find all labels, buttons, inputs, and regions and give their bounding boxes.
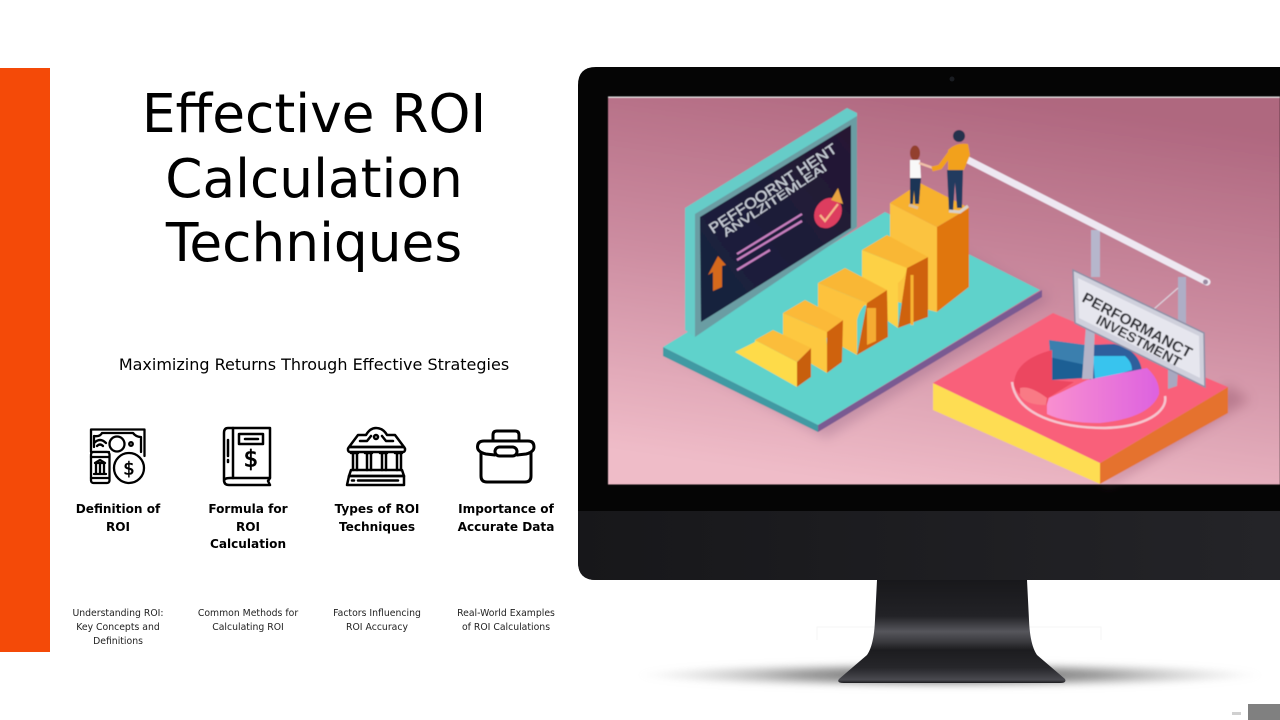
pie chart — [1012, 340, 1165, 428]
heading — [208, 502, 288, 551]
bar 1 — [735, 330, 811, 387]
monitor body — [578, 67, 1280, 580]
icon: money, phone and coin: $ — [123, 458, 135, 480]
icon: money, phone and coin — [90, 428, 146, 484]
description: of ROI Calculations — [462, 622, 550, 633]
description: Understanding ROI: — [72, 608, 164, 619]
column: formula for ROI — [198, 426, 298, 633]
heading: Techniques — [339, 520, 415, 534]
woman — [909, 146, 936, 208]
icon: briefcase — [476, 430, 536, 484]
icon: bank building with columns — [346, 426, 406, 486]
heading — [334, 502, 419, 534]
description — [72, 608, 164, 647]
description: Key Concepts and — [76, 622, 160, 633]
performance sign: PERFORMANCT — [1079, 290, 1195, 362]
heading — [76, 502, 160, 534]
description — [333, 608, 421, 633]
title — [142, 82, 486, 274]
icon: ledger book with dollar sign — [222, 426, 272, 486]
title: Calculation — [165, 147, 463, 210]
orange accent bar — [0, 68, 50, 652]
title: Techniques — [166, 211, 462, 274]
subtitle: Maximizing Returns Through Effective Strategies — [119, 355, 509, 374]
icon: ledger book with dollar sign: $ — [244, 446, 258, 472]
presentation board: ANVLZITEMLEAI — [721, 162, 829, 240]
presentation board — [685, 108, 857, 337]
sign posts — [1082, 325, 1178, 389]
pink platform with pie chart — [933, 270, 1250, 484]
slide corner marker — [1232, 704, 1280, 720]
description: Calculating ROI — [212, 622, 284, 633]
monitor stand and shadow — [638, 580, 1262, 689]
column: importance of accurate data — [457, 430, 555, 633]
column: types of ROI techniques — [333, 426, 421, 633]
description: ROI Accuracy — [346, 622, 408, 633]
pole and posts — [968, 160, 1208, 325]
heading: Accurate Data — [458, 520, 554, 534]
teal platform with bar chart — [663, 108, 1052, 438]
description: Common Methods for — [198, 608, 298, 619]
description: Factors Influencing — [333, 608, 421, 619]
heading: Formula for — [208, 502, 288, 516]
people shaking hands — [909, 130, 970, 212]
heading: Importance of — [458, 502, 554, 516]
column: definition of ROI — [72, 428, 164, 647]
bar 3 — [818, 268, 888, 355]
presentation board: PEFFOORNT HENT — [706, 141, 840, 237]
title: Effective ROI — [142, 82, 486, 145]
description: Real-World Examples — [457, 608, 555, 619]
heading: Definition of — [76, 502, 160, 516]
description: Definitions — [93, 636, 143, 647]
heading: Types of ROI — [335, 502, 419, 516]
screen illustration — [608, 96, 1280, 484]
bar 2 — [783, 300, 843, 373]
heading — [458, 502, 554, 534]
heading: Calculation — [210, 537, 286, 551]
heading: ROI — [106, 520, 130, 534]
man — [932, 130, 970, 212]
description — [198, 608, 298, 633]
bar 5 — [890, 183, 969, 312]
bar 4 — [862, 235, 928, 328]
performance sign: INVESTMENT — [1094, 312, 1185, 370]
description — [457, 608, 555, 633]
performance sign — [1073, 270, 1205, 387]
heading: ROI — [236, 520, 260, 534]
